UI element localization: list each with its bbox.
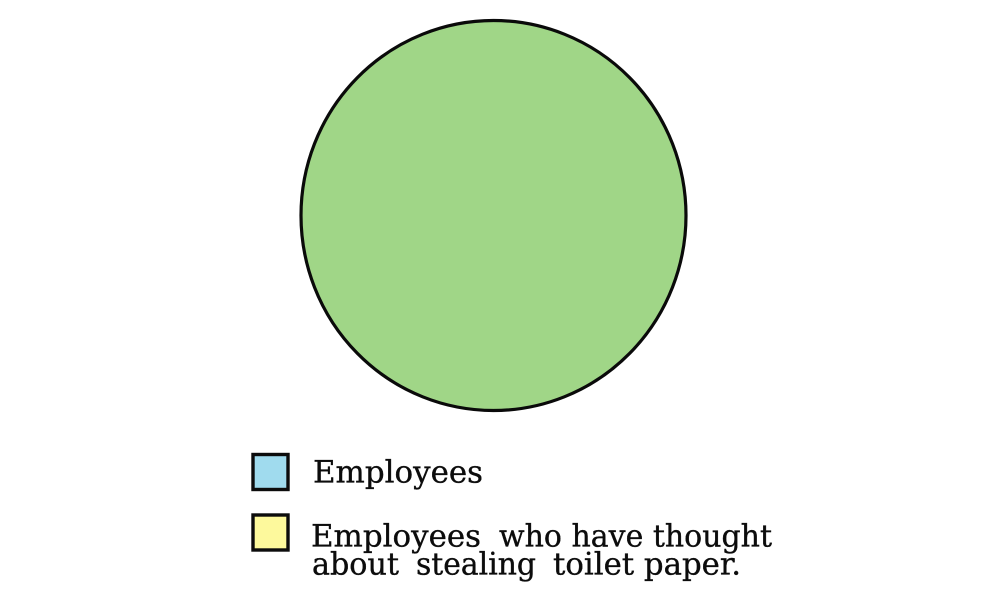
legend label: employees who have thought about stealing toilet paper: Employees bbox=[311, 518, 481, 554]
legend label: employees who have thought about stealing toilet paper: who have thought bbox=[499, 518, 773, 554]
legend label: employees who have thought about stealing toilet paper: stealing bbox=[416, 546, 536, 582]
legend label: employees: Employees bbox=[313, 454, 483, 490]
legend swatch: yellow bbox=[253, 515, 288, 550]
legend bbox=[253, 454, 773, 582]
legend label: employees who have thought about stealing toilet paper bbox=[311, 518, 773, 582]
pie chart: full green circle bbox=[301, 20, 686, 410]
legend swatch: blue bbox=[253, 454, 288, 490]
legend label: employees who have thought about stealing toilet paper: toilet paper. bbox=[553, 546, 741, 582]
legend label: employees who have thought about stealing toilet paper: about bbox=[312, 546, 400, 582]
